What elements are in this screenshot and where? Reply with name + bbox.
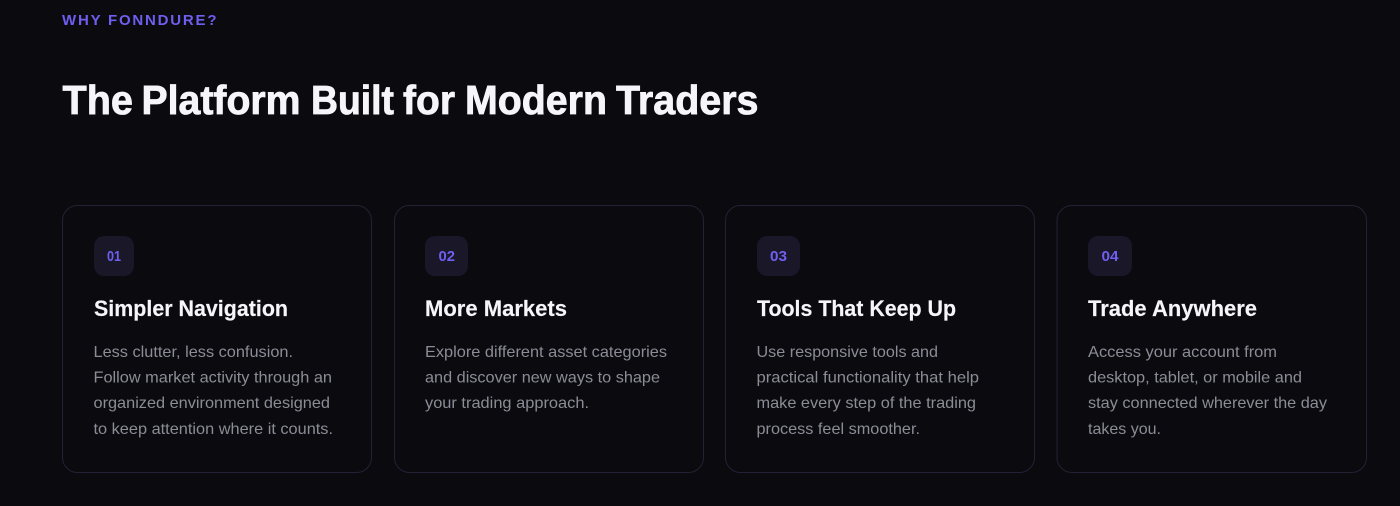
card body: More Markets: your trading approach.: [425, 395, 589, 412]
title: for: [403, 77, 455, 123]
card body: Simpler Navigation: to keep attention where it counts.: [94, 421, 333, 438]
card body: Trade Anywhere: takes you.: [1088, 421, 1161, 438]
card body: Tools That Keep Up: make every step of the trading: [756, 395, 976, 412]
card body: Tools That Keep Up: [756, 344, 979, 438]
card body: Simpler Navigation: Follow market activity through an: [94, 370, 332, 387]
card title: Simpler Navigation: Simpler Navigation: [94, 296, 288, 321]
card body: Trade Anywhere: desktop, tablet, or mobile and: [1088, 370, 1302, 387]
title: Traders: [616, 77, 758, 123]
card body: Trade Anywhere: stay connected wherever the day: [1088, 395, 1327, 412]
badge: 02: [425, 236, 468, 276]
title: Platform: [142, 77, 300, 123]
panel: card 04 Trade Anywhere: [1057, 206, 1366, 472]
card body: Simpler Navigation: Less clutter, less confusion.: [94, 344, 293, 361]
badge: 02: 02: [438, 249, 455, 265]
badge: 03: 03: [770, 249, 787, 265]
card body: More Markets: Explore different asset categories: [425, 344, 667, 361]
title: The: [62, 77, 133, 123]
card body: Tools That Keep Up: Use responsive tools and: [756, 344, 938, 361]
badge: 03: [757, 236, 800, 276]
eyebrow label: WHY FONNDURE?: [62, 12, 216, 29]
title: Modern: [465, 77, 607, 123]
card body: More Markets: [425, 344, 667, 412]
panel: card 02 More Markets: [394, 206, 704, 472]
card body: Simpler Navigation: organized environment designed: [94, 395, 330, 412]
panel: card 01 Simpler Navigation: [62, 206, 372, 472]
badge: 04: 04: [1102, 249, 1118, 265]
card title: Tools That Keep Up: Tools That Keep Up: [757, 296, 956, 321]
card title: Trade Anywhere: Trade Anywhere: [1088, 296, 1257, 321]
card body: Tools That Keep Up: process feel smoother.: [756, 421, 920, 438]
card body: Trade Anywhere: Access your account from: [1088, 344, 1277, 361]
card body: Simpler Navigation: [94, 344, 333, 438]
badge: 04: [1088, 236, 1132, 276]
title: Built: [311, 77, 394, 123]
card body: More Markets: and discover new ways to shape: [425, 370, 660, 387]
card body: Tools That Keep Up: practical functionality that help: [756, 370, 979, 387]
card body: Trade Anywhere: [1088, 344, 1327, 438]
badge: 01: 01: [107, 249, 121, 265]
panel: card 03 Tools That Keep Up: [726, 206, 1034, 472]
card title: More Markets: More Markets: [425, 296, 567, 321]
badge: 01: [94, 236, 134, 276]
